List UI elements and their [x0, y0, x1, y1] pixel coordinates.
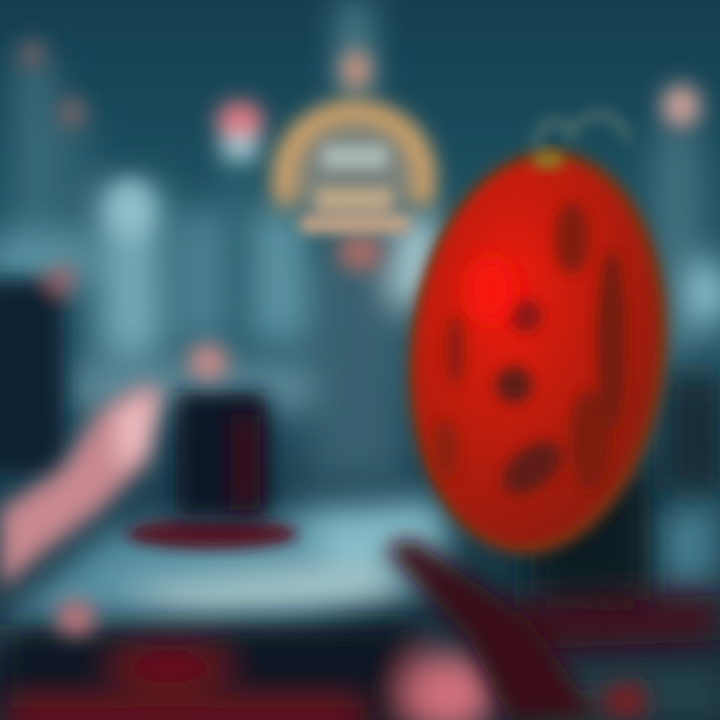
- city skyline: [0, 0, 720, 480]
- small loop above coin: [535, 115, 628, 150]
- table surface: [0, 495, 720, 720]
- dark object at left edge: [0, 265, 75, 475]
- dark cup on saucer: [126, 344, 298, 549]
- coin top rim glow: [532, 151, 564, 169]
- coin stand: [500, 375, 720, 650]
- red streak in foreground: [385, 538, 650, 720]
- large red coin: [388, 115, 688, 567]
- coin symbol and dark markings: [433, 202, 626, 505]
- pink hand at left: [0, 385, 165, 636]
- golden ring on tower: [284, 112, 424, 233]
